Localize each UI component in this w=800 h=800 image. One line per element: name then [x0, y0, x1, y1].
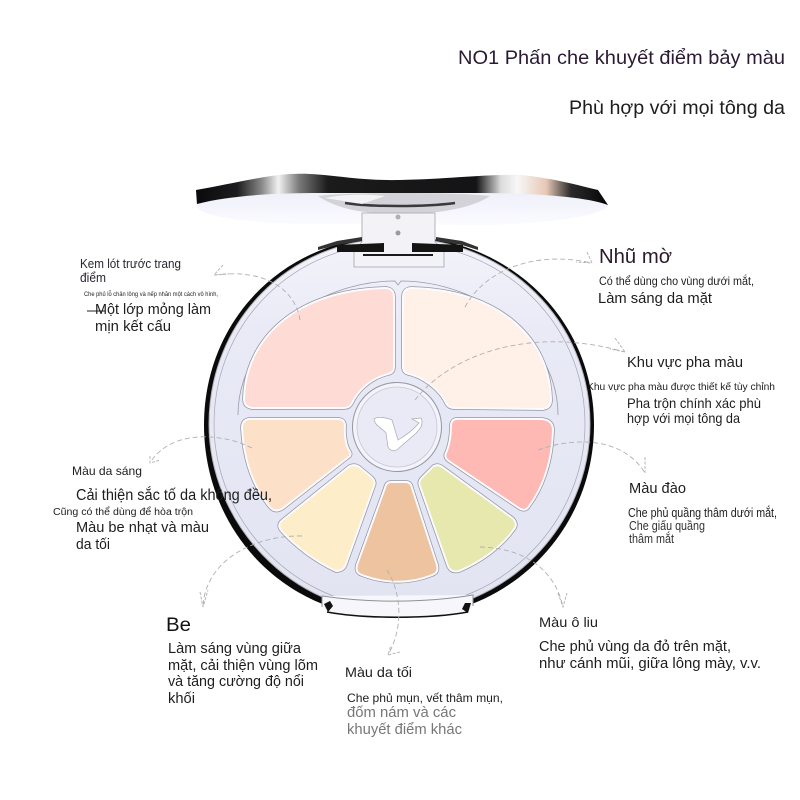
arrow: peach — [538, 442, 645, 473]
label: beige: Be — [166, 615, 191, 636]
label: peach: thâm mắt — [629, 531, 674, 546]
label: dark skin: khuyết điểm khác — [347, 721, 462, 738]
label: olive: Màu ô liu — [539, 614, 598, 630]
label: beige: mặt, cải thiện vùng lõm — [168, 657, 318, 674]
colour pan: peach — [446, 420, 552, 509]
label: shimmer: Nhũ mờ — [599, 245, 672, 268]
label: primer — [80, 257, 218, 335]
colour pan: beige — [280, 466, 374, 570]
label: peach: Che giấu quầng — [629, 519, 705, 533]
colour pan: dark skin — [358, 483, 436, 581]
label: light skin: Màu da sáng — [72, 464, 142, 478]
label: blending zone: Khu vực pha màu — [627, 354, 743, 371]
colour pan: olive — [420, 466, 515, 570]
label: dark skin: đốm nám và các — [347, 704, 456, 721]
colour pan: top right — [404, 289, 550, 408]
title — [458, 47, 785, 119]
label: primer: Che phủ lỗ chân lông và nếp nhăn một cách vô hình, — [84, 291, 218, 298]
label: blending zone: Khu vực pha màu được thiết kế tùy chỉnh — [587, 381, 775, 393]
arrow: olive — [480, 547, 567, 607]
bottom clasp — [322, 595, 473, 617]
arrow: beige — [200, 536, 302, 607]
label: beige: và tăng cường độ nổi — [168, 673, 304, 690]
arrow: shimmer — [465, 252, 592, 307]
label: light skin: Cũng có thể dùng để hòa trộn — [53, 506, 193, 518]
compact lid — [196, 174, 608, 225]
label: peach: Màu đào — [629, 481, 686, 497]
compact body — [204, 236, 594, 618]
arrow: blending zone — [415, 338, 625, 400]
label: blending zone: Pha trộn chính xác phù — [627, 395, 761, 411]
label: light skin: Màu be nhạt và màu — [76, 519, 209, 536]
label: dark skin: Màu da tối — [345, 664, 412, 680]
arrow: primer — [214, 265, 300, 320]
label: shimmer: Có thể dùng cho vùng dưới mắt, — [599, 273, 754, 288]
title: NO1 Phấn che khuyết điểm bảy màu — [458, 47, 785, 69]
label: beige — [166, 615, 318, 707]
arrow: light skin — [150, 437, 252, 463]
label: blending zone: hợp với mọi tông da — [627, 410, 740, 426]
label: shimmer: Làm sáng da mặt — [598, 290, 713, 307]
label: blending zone — [587, 354, 775, 426]
label: primer: Một lớp mỏng làm — [95, 301, 211, 318]
label: olive — [539, 614, 761, 672]
label: light skin — [53, 464, 272, 553]
arrow: dark skin — [387, 570, 400, 655]
label: light skin: da tối — [76, 536, 110, 553]
label: beige: khối — [168, 690, 195, 707]
centre medallion with logo — [352, 382, 442, 472]
label: olive: Che phủ vùng da đỏ trên mặt, — [539, 638, 731, 655]
label: primer: mịn kết cấu — [95, 318, 171, 335]
label: olive: như cánh mũi, giữa lông mày, v.v. — [539, 655, 761, 672]
label: primer: điểm — [80, 271, 106, 285]
label: peach — [628, 481, 777, 546]
label: shimmer — [598, 245, 754, 307]
label: beige: Làm sáng vùng giữa — [168, 640, 302, 657]
label: primer: Kem lót trước trang — [80, 257, 181, 271]
label: dark skin — [345, 664, 503, 738]
label: peach: Che phủ quầng thâm dưới mắt, — [628, 505, 777, 520]
title: Phù hợp với mọi tông da — [569, 97, 785, 119]
colour pan: top left — [245, 289, 393, 407]
label: dark skin: Che phủ mụn, vết thâm mụn, — [347, 691, 503, 705]
colour pan: light skin — [243, 420, 350, 510]
hinge — [318, 213, 478, 267]
label: light skin: Cải thiện sắc tố da không đều, — [76, 487, 272, 504]
